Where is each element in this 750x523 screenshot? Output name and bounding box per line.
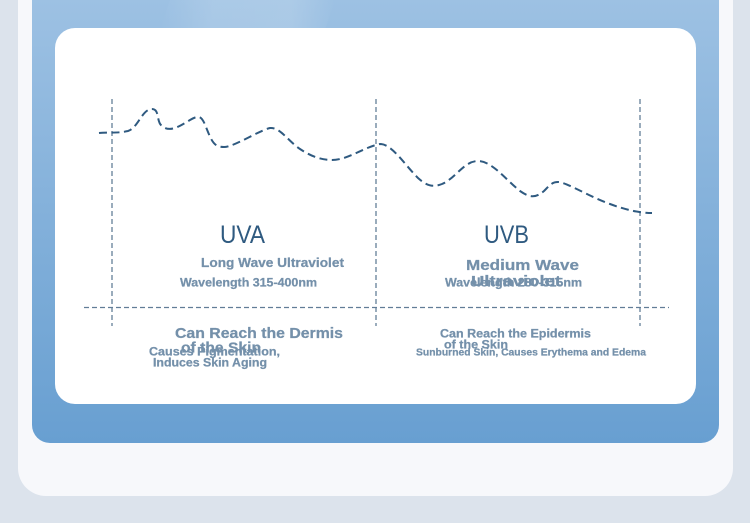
vertical dashed dividers [112, 99, 640, 326]
subtitle: medium wave line 2: Ultraviolet [471, 273, 561, 290]
dashed wave curve [99, 109, 652, 213]
blue panel [32, 0, 719, 443]
effects: UVA line 2: Induces Skin Aging [153, 358, 267, 370]
wavelength: UVB: Wavelength 280-315nm [445, 278, 582, 290]
white chart card [55, 28, 696, 404]
chart: UV spectrum curve [84, 99, 669, 326]
heading: UVA: UVA [220, 221, 265, 249]
effects: UVA line 1: Causes Pigmentation, [149, 346, 280, 358]
penetration: UVB line 1: Can Reach the Epidermis [440, 326, 591, 340]
horizontal dashed divider [84, 306, 669, 308]
effects: UVB: Sunburned Skin, Causes Erythema and Edema [416, 348, 646, 358]
penetration: UVA line 2: of the Skin [181, 340, 261, 356]
wavelength: UVA: Wavelength 315-400nm [180, 278, 317, 290]
section: UVB [416, 221, 646, 358]
penetration: UVB line 2: of the Skin [444, 338, 508, 352]
section: UVA [149, 221, 345, 370]
penetration: UVA line 1: Can Reach the Dermis [175, 325, 343, 342]
subtitle: medium wave line 1: Medium Wave [466, 257, 579, 274]
subtitle: long wave: Long Wave Ultraviolet [201, 255, 345, 270]
heading: UVB: UVB [484, 221, 529, 249]
